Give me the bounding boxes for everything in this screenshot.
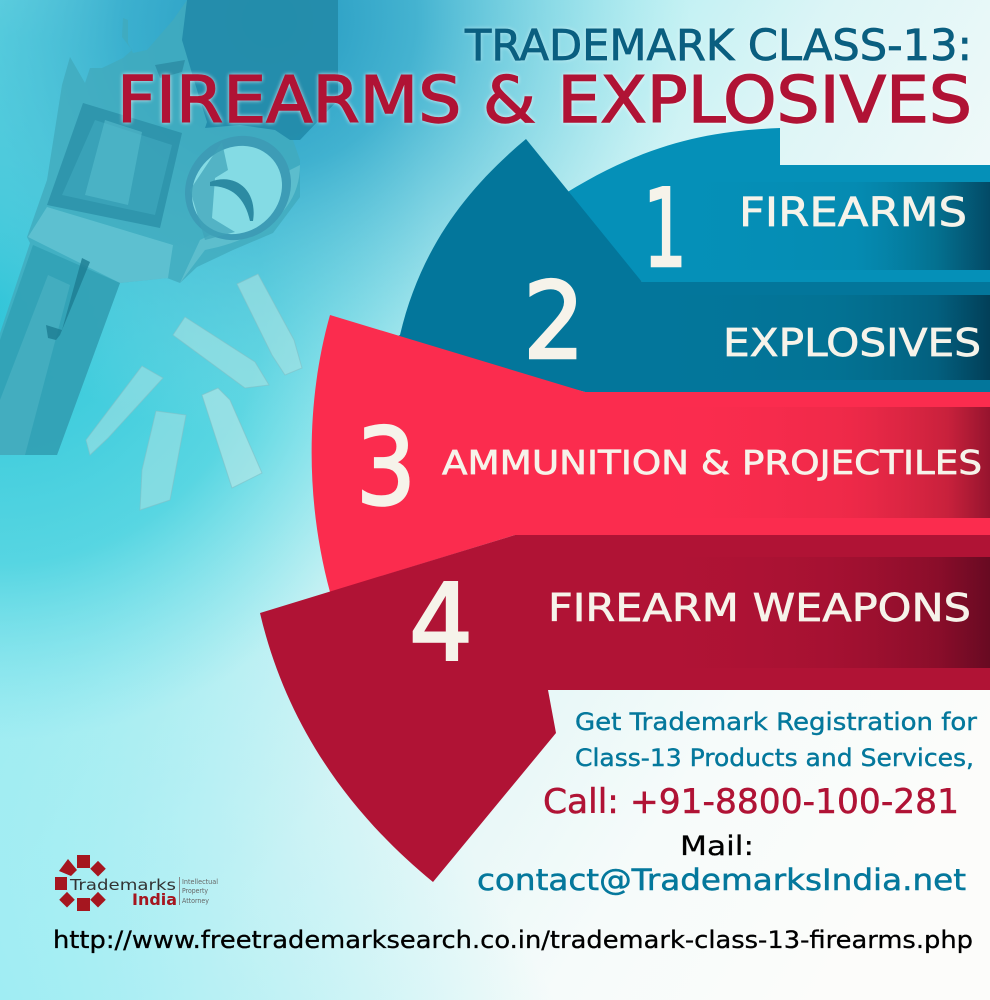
url: http://www.freetrademarksearch.co.in/trademark-class-13-firearms.php <box>53 926 973 954</box>
title <box>117 21 972 138</box>
email address: contact@TrademarksIndia.net <box>477 863 966 897</box>
logo: trademarks india: Trademarks <box>69 876 176 894</box>
logo: trademarks india: India <box>132 890 177 909</box>
title: TRADEMARK CLASS-13: <box>464 21 972 71</box>
panel: firearms <box>555 128 990 292</box>
panel: explosives <box>390 139 990 392</box>
panel: firearm weapons <box>260 535 990 882</box>
mail label: Mail: <box>680 831 754 862</box>
logo: trademarks india: Attorney <box>182 897 209 905</box>
phone number: Call: +91-8800-100-281 <box>543 782 959 822</box>
number 3: 3 <box>356 406 416 529</box>
label: firearms: FIREARMS <box>739 190 967 236</box>
logo: trademarks india <box>55 855 218 911</box>
image: faded revolver <box>0 0 338 455</box>
logo: trademarks india: Intellectual <box>182 878 218 886</box>
number 4: 4 <box>409 562 473 685</box>
label: ammunition and projectiles: AMMUNITION & PROJECTILES <box>442 443 982 482</box>
label: explosives: EXPLOSIVES <box>723 321 981 365</box>
number 2: 2 <box>523 260 585 383</box>
label: firearm weapons: FIREARM WEAPONS <box>548 586 971 630</box>
icon: ring of red squares <box>55 855 106 911</box>
call to action: Get Trademark Registration for <box>575 708 977 736</box>
call to action line 2: Class-13 Products and Services, <box>575 744 974 772</box>
logo: trademarks india: Property <box>182 887 208 895</box>
number 1: 1 <box>643 167 687 292</box>
image: bullets <box>86 274 302 510</box>
panel: ammunition and projectiles <box>312 315 990 592</box>
title: FIREARMS & EXPLOSIVES <box>117 64 972 138</box>
